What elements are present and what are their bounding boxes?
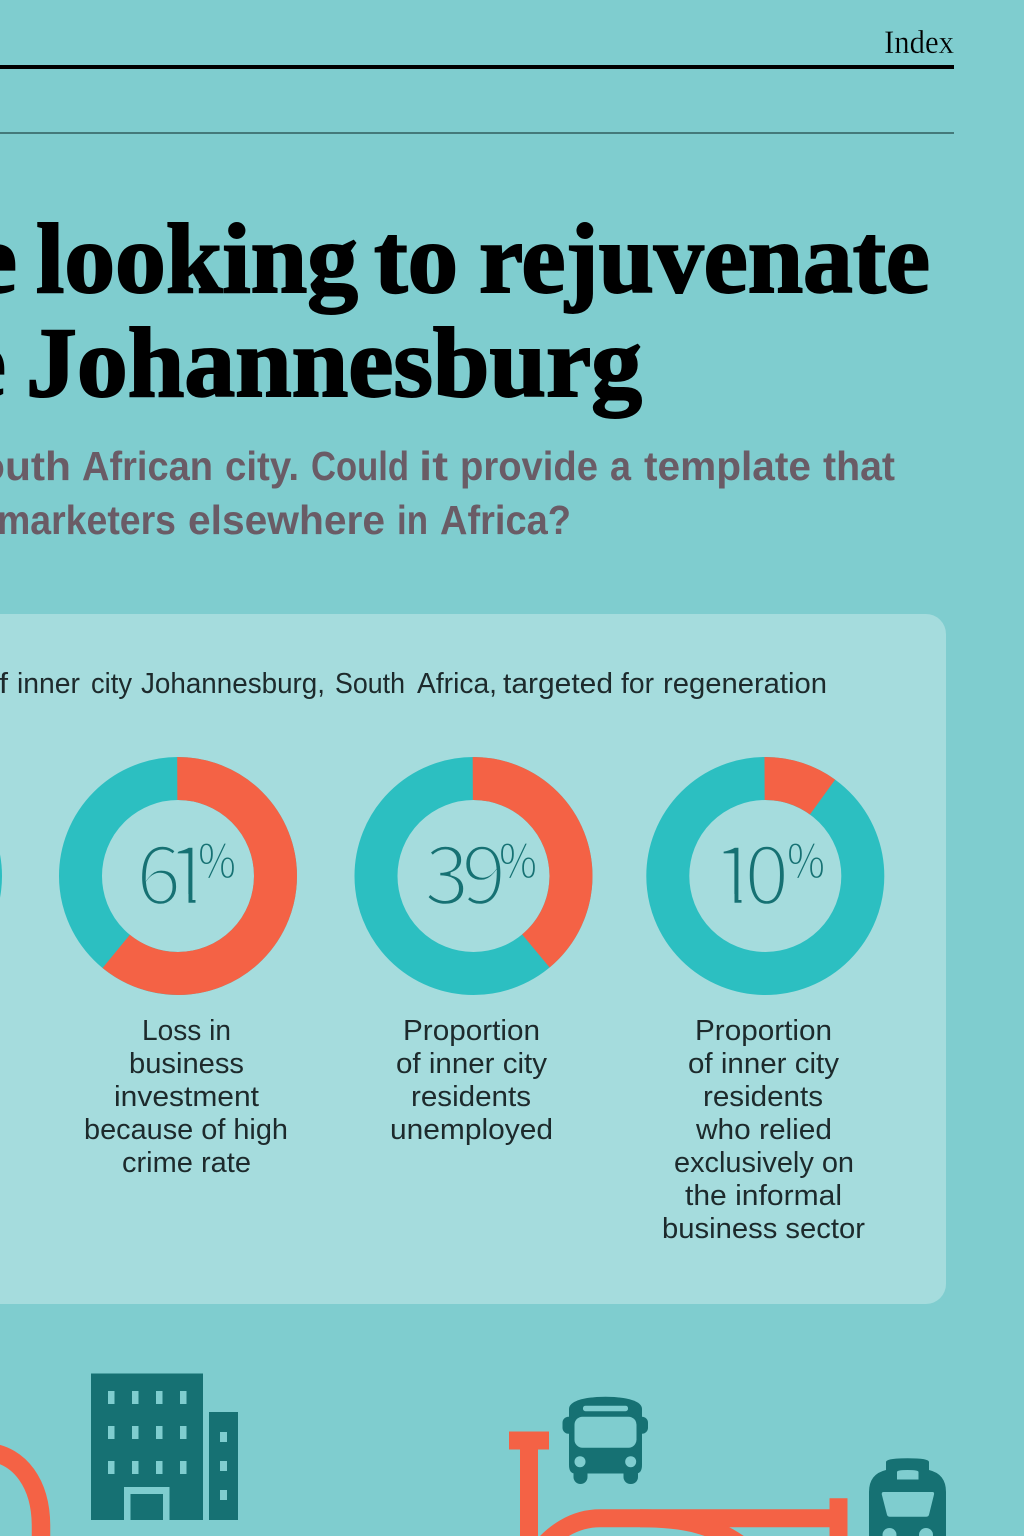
donut chart: 39%: 3 (424, 810, 470, 928)
title: to (374, 203, 458, 314)
icon: bus (562, 1397, 648, 1484)
subtitle: African (82, 443, 213, 489)
label: 10%: the informal (685, 1180, 842, 1212)
label: 61%: investment (114, 1081, 259, 1113)
panel heading: for (621, 668, 654, 700)
subtitle: city. (225, 443, 299, 489)
subtitle: it (419, 443, 448, 489)
panel heading: regeneration (663, 668, 827, 700)
panel heading: inner (17, 668, 80, 700)
label: 10%: residents (703, 1081, 823, 1113)
panel heading: South (335, 668, 405, 700)
label: 10%: exclusively on (674, 1147, 854, 1179)
subtitle (0, 443, 895, 543)
route line: transit network (509, 1440, 838, 1536)
label: 10%: of inner city (688, 1048, 839, 1080)
subtitle: Africa? (440, 497, 571, 543)
icon: train (869, 1458, 946, 1536)
panel heading (0, 668, 827, 700)
panel heading: city (91, 668, 132, 700)
partial donut at left edge (0, 757, 2, 995)
icon: office building (91, 1374, 238, 1520)
section label: Index: Index (884, 25, 954, 61)
title (0, 203, 930, 418)
panel: inner city statistics (0, 614, 946, 1304)
panel heading: Africa, (417, 668, 497, 700)
subtitle: template (644, 443, 811, 489)
title: looking (36, 203, 358, 314)
subtitle: that (823, 443, 895, 489)
donut chart: 61%: 1 (166, 810, 212, 928)
label: 39%: residents (411, 1081, 531, 1113)
subtitle: marketers (0, 497, 176, 543)
donut chart: 61% (80, 778, 276, 974)
subtitle: elsewhere (188, 497, 385, 543)
header rules (0, 65, 954, 134)
label: 10%: business sector (662, 1213, 865, 1245)
donut chart: 61%: % (198, 823, 236, 892)
donut chart: 10%: % (787, 823, 825, 892)
label: 61%: because of high (84, 1114, 288, 1146)
label: 61%: crime rate (122, 1147, 251, 1179)
donut chart: 61%: 6 (136, 810, 182, 928)
subtitle: Could (311, 443, 409, 489)
panel heading: Johannesburg, (141, 668, 325, 700)
donut chart: 10%: 0 (744, 810, 790, 928)
donut chart: 10%: 1 (712, 810, 758, 928)
label: 10%: Proportion (695, 1015, 832, 1047)
donut chart: 39% (376, 778, 571, 974)
title: Johannesburg (26, 307, 642, 418)
donut chart: 39%: 9 (461, 810, 507, 928)
label: 10%: who relied (695, 1114, 832, 1146)
subtitle: a (610, 443, 632, 489)
label: 39%: unemployed (390, 1114, 553, 1146)
label: 39%: of inner city (396, 1048, 547, 1080)
route line: left curve (0, 1452, 41, 1536)
subtitle: provide (460, 443, 598, 489)
label: 61% (84, 1015, 288, 1179)
donut chart: 39%: % (499, 823, 537, 892)
label: 61%: Loss in (142, 1015, 231, 1047)
label: 10% (662, 1015, 865, 1245)
subtitle: in (397, 497, 428, 543)
panel heading: targeted (503, 668, 613, 700)
label: 39%: Proportion (403, 1015, 540, 1047)
label: 61%: business (129, 1048, 244, 1080)
title: rejuvenate (479, 203, 930, 314)
donut chart: 10% (668, 778, 863, 974)
label: 39% (390, 1015, 553, 1146)
